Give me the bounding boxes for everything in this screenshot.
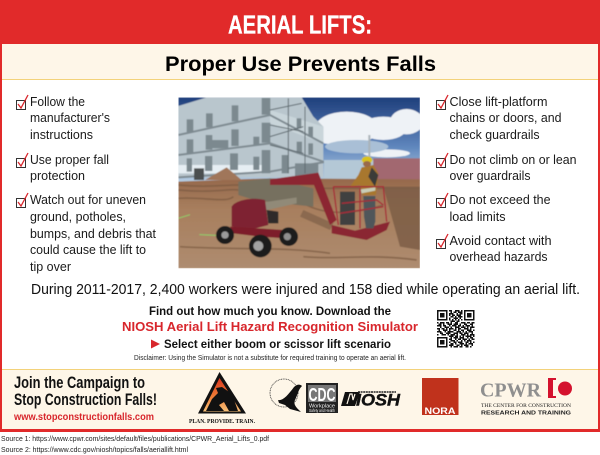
item: uneven ground: Watch out for uneven [30,192,146,207]
logo: CPWR: RESEARCH AND TRAINING [481,410,571,416]
soil strata [178,185,420,260]
sky [178,97,420,187]
campaign message: Join the Campaign to [14,373,145,392]
item: do not climb [450,152,576,183]
checkbox: follow instructions [16,95,28,110]
logo: plan provide train [189,372,255,425]
item: load limits [450,192,550,224]
arrow [151,340,160,348]
item: overhead hazards: overhead hazards [450,249,548,264]
logo: CPWR: CPWR [480,380,542,402]
simulator call to action: NIOSH Aerial Lift Hazard Recognition Simulator [122,319,418,334]
logo: CDC workplace safety and health: Safety and Health [309,408,335,413]
distant building [178,97,323,177]
item: do not climb: Do not climb on or lean [450,152,576,167]
item: uneven ground: tip over [30,259,72,274]
simulator call to action: Find out how much you know. Download the [149,306,391,318]
item: uneven ground: could cause the lift to [30,242,146,257]
right checklist [436,94,576,264]
item: uneven ground [30,192,156,274]
item: load limits: load limits [450,209,506,224]
item: uneven ground: ground, potholes, [30,209,126,224]
logo: NORA: NORA [424,406,456,416]
simulator call to action [122,306,418,362]
logo: CDC workplace safety and health: CDC [308,385,336,405]
checkbox: do not climb [436,153,448,168]
green ground markers [178,215,217,235]
worker [363,196,375,228]
item: follow instructions: instructions [30,127,93,142]
scaffold [270,98,305,173]
item: overhead hazards [450,233,552,264]
logo: CPWR [480,378,572,416]
item: close chains: chains or doors, and [450,110,562,125]
logo: CPWR: THE CENTER FOR CONSTRUCTION [481,403,571,409]
logo: NIOSH: IOSH [356,392,401,410]
checkbox: uneven ground [16,193,28,208]
simulator call to action: Disclaimer: Using the Simulator is not a substitute for required training to operate an aerial lift. [134,355,406,362]
source citations: Source 1: https://www.cpwr.com/sites/default/files/publications/CPWR_Aerial_Lifts_0.pdf [1,434,270,443]
logo: CDC workplace safety and health: Workplace [309,404,335,410]
item: load limits: Do not exceed the [450,192,550,207]
boom arms [238,178,313,207]
white wall and container [324,160,374,177]
subtitle band: Proper Use Prevents Falls [165,52,436,76]
lift body [232,199,268,229]
logo: plan provide train: PLAN. PROVIDE. TRAIN. [189,418,255,425]
source citations: Source 2: https://www.cdc.gov/niosh/topics/falls/aeriallift.html [1,445,188,454]
campaign message: Stop Construction Falls! [14,390,157,409]
source citations [1,434,270,454]
photo: worker on boom lift at construction site [178,97,423,268]
campaign message: www.stopconstructionfalls.com [13,412,154,423]
soil mound and equipment [205,167,242,180]
item: do not climb: over guardrails [450,168,531,183]
trench shadow [383,187,420,250]
item: close chains: check guardrails [450,127,540,142]
item: fall protection [30,152,109,183]
checkbox: close chains [436,95,448,110]
item: fall protection: protection [30,168,85,183]
item: follow instructions: Follow the [30,94,85,109]
QR code [437,310,474,348]
simulator call to action: Select either boom or scissor lift scenario [164,339,391,351]
clouds [313,109,423,157]
wheels [216,226,298,257]
platform [340,192,355,225]
checkbox: overhead hazards [436,234,448,248]
checkbox: fall protection [16,153,28,168]
item: follow instructions [30,94,110,142]
item: close chains [450,94,562,142]
subtitle band [2,44,598,80]
checkbox: load limits [436,193,448,208]
campaign footer band [2,369,598,429]
item: close chains: Close lift-platform [450,94,548,109]
campaign message [13,373,157,423]
item: uneven ground: bumps, and debris that [30,226,156,241]
item: follow instructions: manufacturer's [30,110,110,125]
logo: NORA [422,378,458,416]
title banner: AERIAL LIFTS: [228,10,372,40]
logo: CDC workplace safety and health [306,383,338,413]
item: overhead hazards: Avoid contact with [450,233,552,248]
injury statistic: During 2011-2017, 2,400 workers were injured and 158 died while operating an aerial lift. [31,282,580,298]
ground [178,178,420,268]
item: fall protection: Use proper fall [30,152,109,167]
logo: HHS eagle [270,379,302,412]
logo: NIOSH [341,392,401,410]
left checklist [16,94,156,274]
